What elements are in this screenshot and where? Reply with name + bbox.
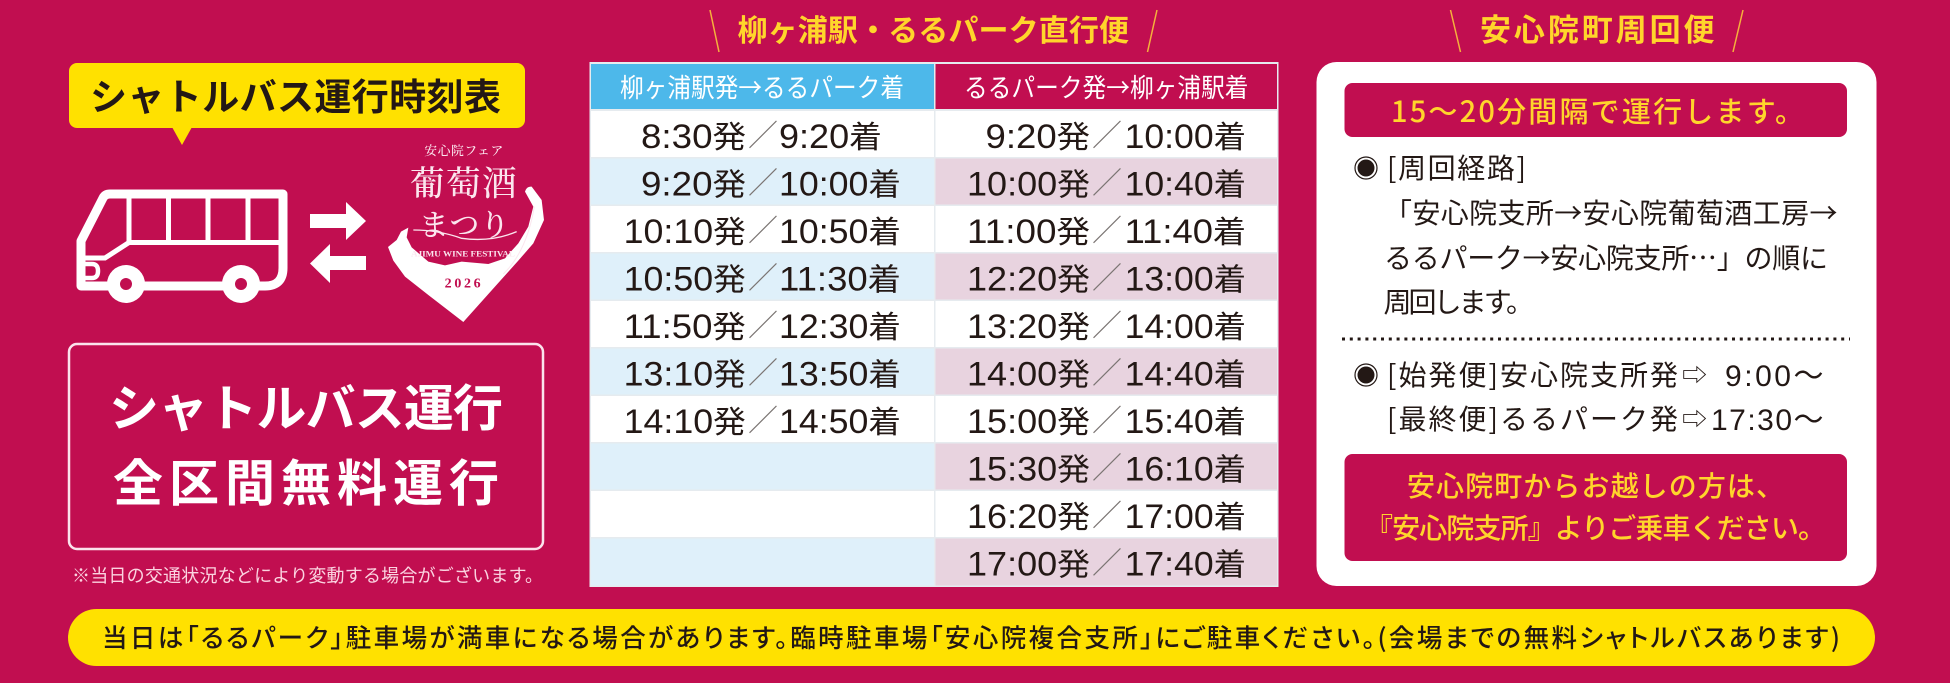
table column: Yanagigaura departures: 9:20発 [641, 166, 746, 204]
callout: parking notice [68, 609, 1875, 666]
banner: service interval: 15〜20分間隔で運行します。 [1391, 89, 1804, 131]
banner: boarding guidance: 安心院町からお越しの方は、 [1407, 465, 1784, 505]
heading: direct service: 柳ヶ浦駅・るるパーク直行便 [738, 6, 1129, 50]
table column: Ruru Park departures: 14:40着 [1125, 356, 1246, 394]
table column: Ruru Park departures: 10:00発 [967, 166, 1090, 204]
table column: Yanagigaura departures: 8:30発 [641, 118, 746, 156]
logo: wine festival 2026: まつり [419, 200, 510, 244]
table column: Ruru Park departures: ／ [1092, 301, 1122, 345]
table column: Ruru Park departures: 17:40着 [1125, 546, 1246, 584]
table column: Yanagigaura departures: 13:50着 [779, 356, 901, 394]
table header: to Ruru Park: 柳ヶ浦駅発→るるパーク着 [620, 68, 904, 105]
table column: Yanagigaura departures: 14:10発 [624, 403, 746, 441]
table column: Ruru Park departures: 16:10着 [1125, 450, 1246, 488]
table column: Ruru Park departures: ／ [1092, 396, 1122, 440]
table column: Ruru Park departures: ／ [1092, 254, 1122, 298]
table column: Ruru Park departures: 12:20発 [967, 260, 1090, 298]
table column: Yanagigaura departures: ／ [748, 396, 778, 440]
table column: Ruru Park departures: 11:00発 [967, 213, 1090, 251]
table column: Yanagigaura departures: 11:30着 [779, 260, 901, 298]
callout: timetable title tag [69, 63, 525, 145]
table column: Yanagigaura departures: 10:00着 [779, 166, 901, 204]
table column: Ruru Park departures: 9:20発 [986, 118, 1090, 156]
panel: free service notice: シャトルバス運行 [109, 369, 503, 441]
icon: two-way arrows [310, 202, 366, 283]
table column: Ruru Park departures: ／ [1092, 348, 1122, 392]
callout: parking notice: 当日は「るるパーク」駐車場が満車になる場合があります。臨時駐車場「安心院複合支所」にご駐車ください。(会場までの無料シャトルバスあります) [102, 618, 1840, 655]
table column: Yanagigaura departures: 9:20着 [779, 118, 882, 156]
table column: Yanagigaura departures: ／ [748, 158, 778, 202]
text block: loop route: 周回します。 [1384, 281, 1534, 321]
table column: Yanagigaura departures: 13:10発 [624, 356, 746, 394]
table column: Ruru Park departures: ／ [1092, 111, 1122, 155]
table column: Ruru Park departures: ／ [1092, 538, 1122, 582]
panel: free service notice: 全区間無料運行 [113, 444, 499, 516]
table column: Yanagigaura departures: ／ [748, 206, 778, 250]
table column: Ruru Park departures: 10:00着 [1125, 118, 1246, 156]
panel: free service notice [69, 344, 543, 549]
table header: to Yanagigaura station: るるパーク発→柳ヶ浦駅着 [964, 68, 1248, 105]
logo: wine festival 2026 [388, 140, 544, 322]
table column: Yanagigaura departures: ／ [748, 348, 778, 392]
text block: loop route: [周回経路] [1387, 147, 1526, 187]
table column: Yanagigaura departures: 10:50着 [779, 213, 901, 251]
text block: first and last buses: ⇨ [1682, 400, 1707, 436]
heading: town loop service: 安心院町周回便 [1480, 5, 1714, 50]
table column: Ruru Park departures: 16:20発 [967, 498, 1090, 536]
text block: first and last buses: 17:30〜 [1711, 404, 1824, 437]
table column: Ruru Park departures: ／ [1092, 491, 1122, 535]
icon: bus [81, 194, 283, 303]
table column: Ruru Park departures: 15:40着 [1125, 403, 1246, 441]
table column: Ruru Park departures: 14:00発 [967, 356, 1090, 394]
banner: boarding guidance [1344, 454, 1847, 561]
logo: wine festival 2026: 2026 [445, 276, 483, 291]
panel: town loop service details [1316, 62, 1876, 586]
table: direct service timetable [590, 62, 1278, 587]
table column: Ruru Park departures: 14:00着 [1125, 308, 1246, 346]
logo: wine festival 2026: 安心院フェア [424, 140, 503, 159]
text block: loop route: るるパーク→安心院支所…」の順に [1384, 237, 1828, 277]
banner: boarding guidance: 『安心院支所』よりご乗車ください。 [1365, 507, 1826, 547]
text block: first and last buses [1355, 354, 1824, 438]
table column: Ruru Park departures: ／ [1092, 444, 1122, 488]
logo: wine festival 2026: AJIMU WINE FESTIVAL [411, 250, 515, 259]
table column: Yanagigaura departures: 14:50着 [779, 403, 901, 441]
table column: Yanagigaura departures: ／ [748, 111, 778, 155]
table column: Ruru Park departures: ／ [1092, 158, 1122, 202]
table column: Ruru Park departures: 17:00発 [967, 546, 1090, 584]
table column: Yanagigaura departures: 12:30着 [779, 308, 901, 346]
text block: loop route [1355, 147, 1838, 321]
text block: first and last buses: [最終便]るるパーク発 [1387, 398, 1678, 438]
table column: Ruru Park departures: ／ [1092, 206, 1122, 250]
table column: Ruru Park departures: 13:20発 [967, 308, 1090, 346]
text block: first and last buses: ⇨ [1682, 356, 1707, 392]
table column: Ruru Park departures: 15:00発 [967, 403, 1090, 441]
table column: Ruru Park departures [967, 111, 1246, 584]
table column: Yanagigaura departures: ／ [748, 301, 778, 345]
footnote: traffic disclaimer: ※当日の交通状況などにより変動する場合がございます。 [72, 562, 543, 588]
callout: timetable title tag: シャトルバス運行時刻表 [90, 67, 501, 121]
text block: loop route: 「安心院支所→安心院葡萄酒工房→ [1384, 192, 1838, 232]
table column: Ruru Park departures: 17:00着 [1125, 498, 1246, 536]
text block: first and last buses: 9:00〜 [1725, 360, 1824, 393]
table column: Yanagigaura departures: ／ [748, 254, 778, 298]
logo: wine festival 2026: 葡萄酒 [410, 155, 517, 205]
text block: first and last buses: [始発便]安心院支所発 [1387, 354, 1678, 394]
table column: Yanagigaura departures: 11:50発 [624, 308, 746, 346]
table column: Ruru Park departures: 10:40着 [1125, 166, 1246, 204]
banner: service interval [1344, 83, 1847, 137]
table column: Yanagigaura departures: 10:10発 [624, 213, 746, 251]
table column: Yanagigaura departures: 10:50発 [624, 260, 746, 298]
table column: Ruru Park departures: 11:40着 [1125, 213, 1246, 251]
table column: Ruru Park departures: 13:00着 [1125, 260, 1246, 298]
table column: Ruru Park departures: 15:30発 [967, 450, 1090, 488]
table column: Yanagigaura departures [624, 111, 901, 441]
